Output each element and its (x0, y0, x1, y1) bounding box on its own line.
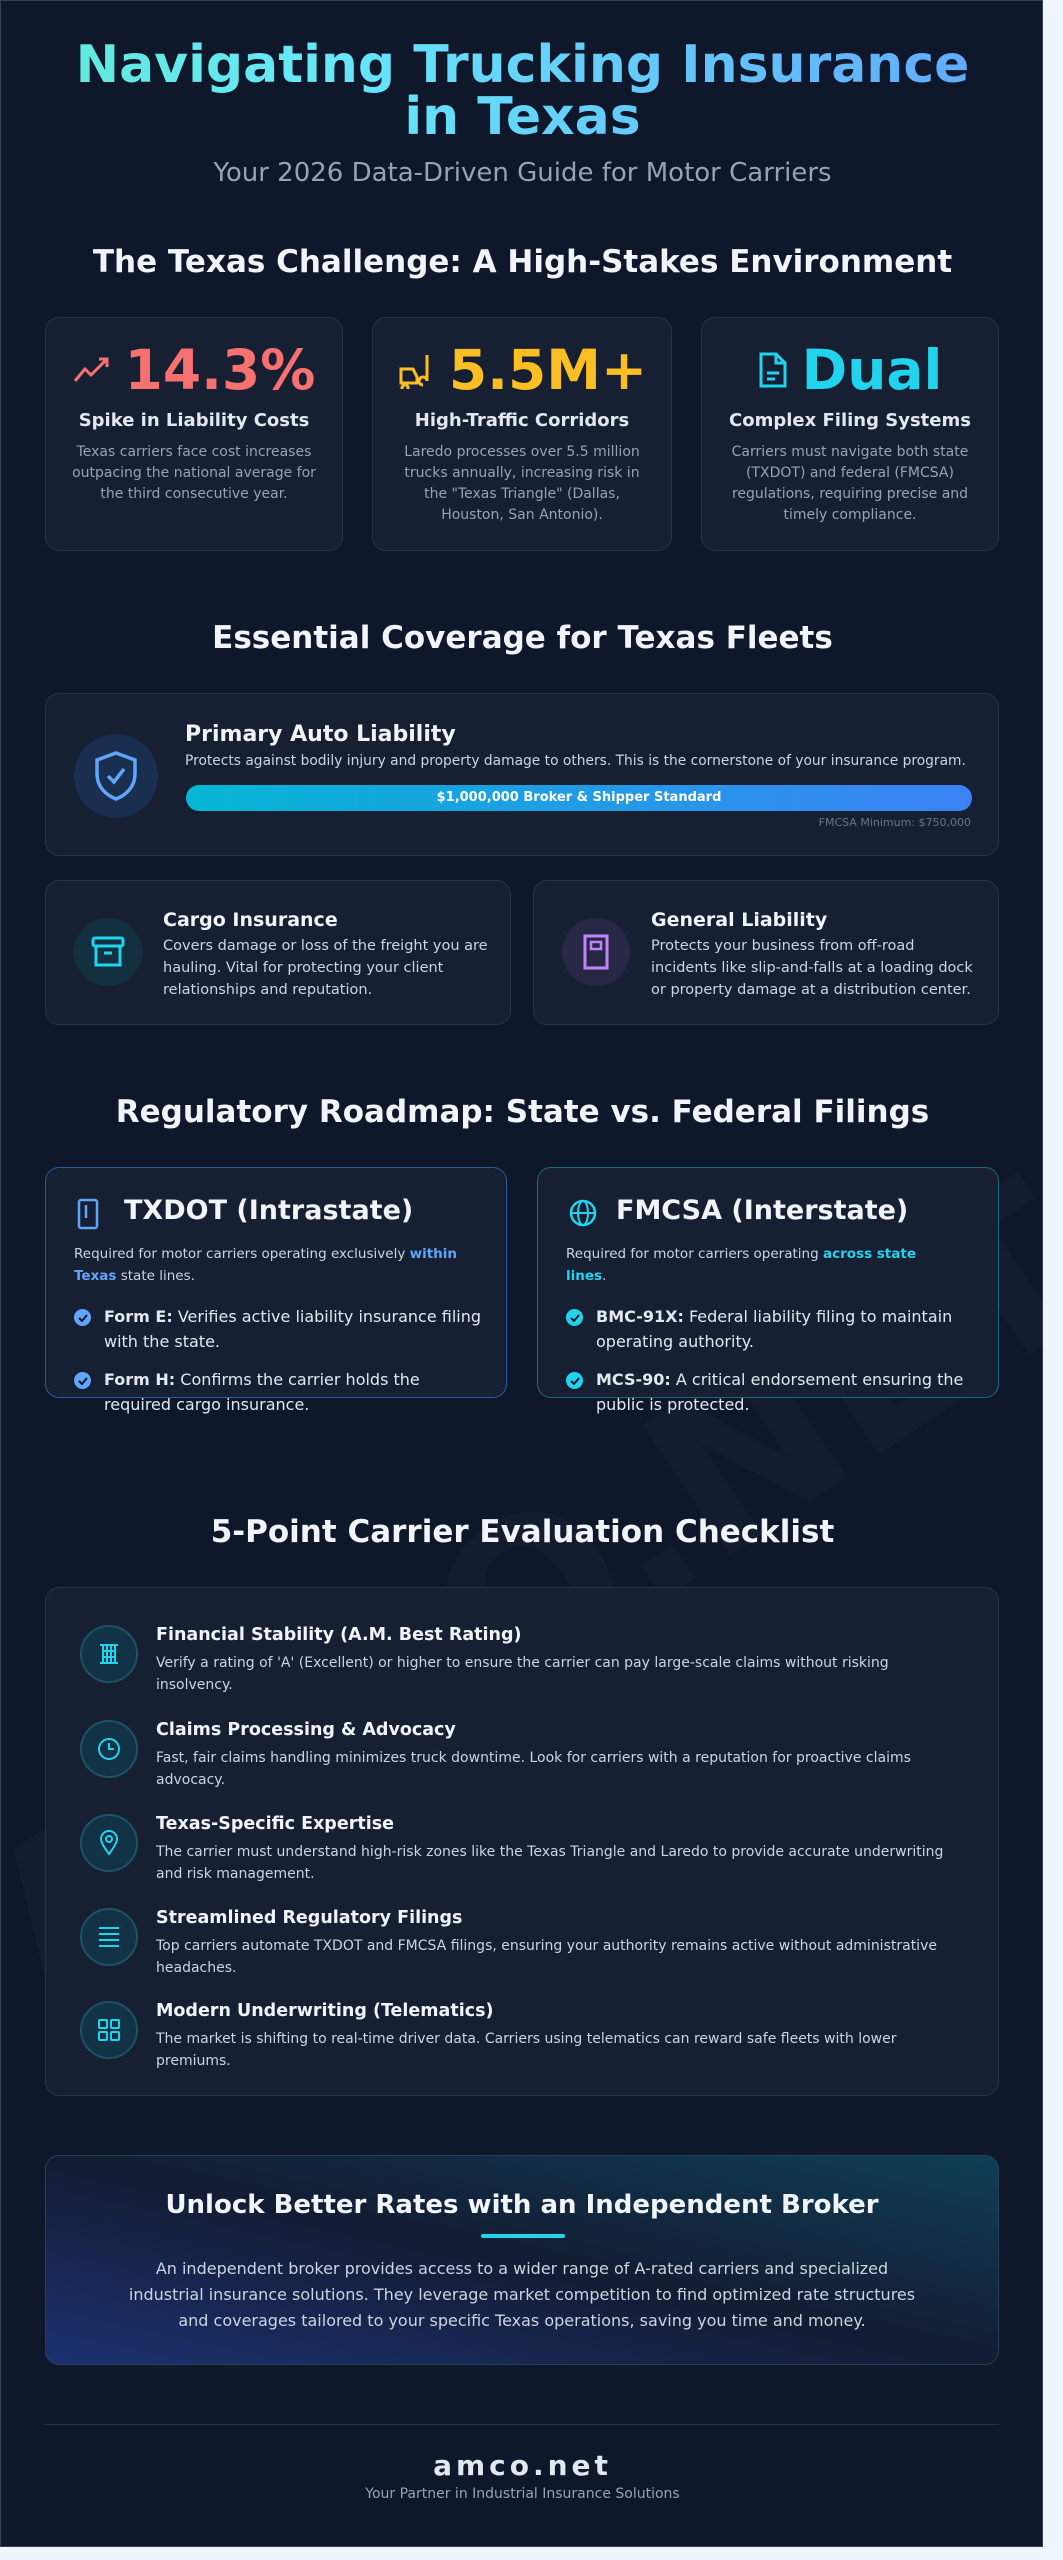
item: regulatory filings (80, 1908, 937, 1976)
item: financial stability: Financial Stability (A.M. Best Rating) (156, 1625, 522, 1645)
icon: phone (78, 1198, 98, 1230)
panel: checklist (45, 1587, 999, 2096)
title (1, 39, 1044, 143)
list item: Form H: Form H: Confirms the carrier holds the required cargo insurance. (104, 1370, 420, 1414)
panel: general liability: Protects your business from off-road incidents like slip-and-falls at a loading dock or property damage at a distribution center. (651, 938, 973, 998)
icon: shield (74, 734, 158, 818)
stat card: 14.3%: Spike in Liability Costs (79, 410, 309, 431)
heading: essential coverage: Essential Coverage for Texas Fleets (212, 620, 833, 656)
panel: primary auto liability: Primary Auto Liability (185, 722, 456, 747)
stat number: 14.3% (125, 338, 315, 402)
item: financial stability (80, 1625, 889, 1693)
icon: door (562, 918, 630, 986)
callout: independent broker (45, 2155, 999, 2365)
item: regulatory filings: Top carriers automate TXDOT and FMCSA filings, ensuring your authority remains active without administrative headaches. (156, 1938, 937, 1976)
item: texas expertise: Texas-Specific Expertise (156, 1814, 394, 1834)
item: texas expertise (80, 1814, 943, 1882)
stat card: 5.5M+: Laredo processes over 5.5 million trucks annually, increasing risk in the "Texas Triangle" (Dallas, Houston, San Antonio). (404, 444, 640, 523)
callout: independent broker: Unlock Better Rates with an Independent Broker (165, 2190, 879, 2220)
panel: FMCSA (537, 1167, 999, 1398)
panel: cargo insurance (45, 880, 511, 1025)
icon: globe (570, 1200, 596, 1226)
stat card: 5.5M+: High-Traffic Corridors (415, 410, 629, 431)
panel: cargo insurance: Cargo Insurance (163, 909, 338, 931)
item: telematics (80, 2001, 896, 2069)
heading: checklist: 5-Point Carrier Evaluation Checklist (211, 1514, 834, 1550)
stat number: Dual (802, 338, 942, 402)
list item: MCS-90: MCS-90: A critical endorsement ensuring the public is protected. (596, 1370, 963, 1414)
panel: primary auto liability: FMCSA Minimum: $750,000 (819, 816, 971, 829)
footer: amco.net (433, 2449, 612, 2482)
item: telematics: The market is shifting to real-time driver data. Carriers using telematics can reward safe fleets with lower premiums. (156, 2031, 896, 2069)
panel: TXDOT: Required for motor carriers operating exclusively within Texas state lines. (74, 1246, 457, 1284)
bar: coverage standard (186, 785, 972, 811)
item: telematics: Modern Underwriting (Telematics) (156, 2001, 494, 2021)
subtitle: Your 2026 Data-Driven Guide for Motor Carriers (213, 158, 832, 188)
stat number: 5.5M+ (449, 338, 647, 402)
stat card: Dual (701, 317, 999, 551)
stat card: 5.5M+ (372, 317, 672, 551)
footer: Your Partner in Industrial Insurance Solutions (365, 2486, 680, 2502)
list item: Form E: Form E: Verifies active liability insurance filing with the state. (104, 1307, 481, 1351)
icon: box (74, 918, 142, 986)
panel: cargo insurance: Covers damage or loss of the freight you are hauling. Vital for protecting your client relationships and reputation. (163, 938, 488, 998)
panel: TXDOT (45, 1167, 507, 1398)
item: texas expertise: The carrier must understand high-risk zones like the Texas Triangle and Laredo to provide accurate underwriting and risk management. (156, 1844, 943, 1882)
footer (365, 2449, 680, 2502)
item: claims (80, 1720, 911, 1788)
bar: coverage standard: $1,000,000 Broker & Shipper Standard (437, 790, 721, 805)
item: claims: Claims Processing & Advocacy (156, 1720, 456, 1740)
title: in Texas (404, 87, 641, 147)
stat card: 14.3% (45, 317, 343, 551)
stat card: Dual: Complex Filing Systems (729, 410, 971, 431)
panel: FMCSA: FMCSA (Interstate) (616, 1195, 908, 1226)
heading: Texas challenge: The Texas Challenge: A High-Stakes Environment (93, 244, 952, 280)
stat card: 14.3%: Texas carriers face cost increases outpacing the national average for the third consecutive year. (72, 444, 316, 502)
item: financial stability: Verify a rating of 'A' (Excellent) or higher to ensure the carrier can pay large-scale claims without risking insolvency. (156, 1655, 889, 1693)
callout: independent broker: An independent broker provides access to a wider range of A-rated carriers and specialized industrial insurance solutions. They leverage market competition to find optimized rate structures and coverages tailored to your specific Texas operations, saving you time and money. (129, 2259, 915, 2330)
stat card: Dual: Carriers must navigate both state (TXDOT) and federal (FMCSA) regulations, requiring precise and timely compliance. (732, 444, 968, 523)
panel: primary auto liability: Protects against bodily injury and property damage to others. This is the cornerstone of your insurance program. (185, 753, 966, 769)
panel: primary auto liability (45, 693, 999, 856)
panel: FMCSA: Required for motor carriers operating across state lines. (566, 1246, 916, 1284)
panel: general liability: General Liability (651, 909, 827, 931)
heading: regulatory roadmap: Regulatory Roadmap: State vs. Federal Filings (116, 1094, 929, 1130)
panel: TXDOT: TXDOT (Intrastate) (124, 1195, 413, 1226)
item: regulatory filings: Streamlined Regulatory Filings (156, 1908, 462, 1928)
panel: general liability (533, 880, 999, 1025)
item: claims: Fast, fair claims handling minimizes truck downtime. Look for carriers with a reputation for proactive claims advocacy. (156, 1750, 911, 1788)
title: Navigating Trucking Insurance (76, 35, 969, 95)
list item: BMC-91X: BMC-91X: Federal liability filing to maintain operating authority. (596, 1307, 952, 1351)
